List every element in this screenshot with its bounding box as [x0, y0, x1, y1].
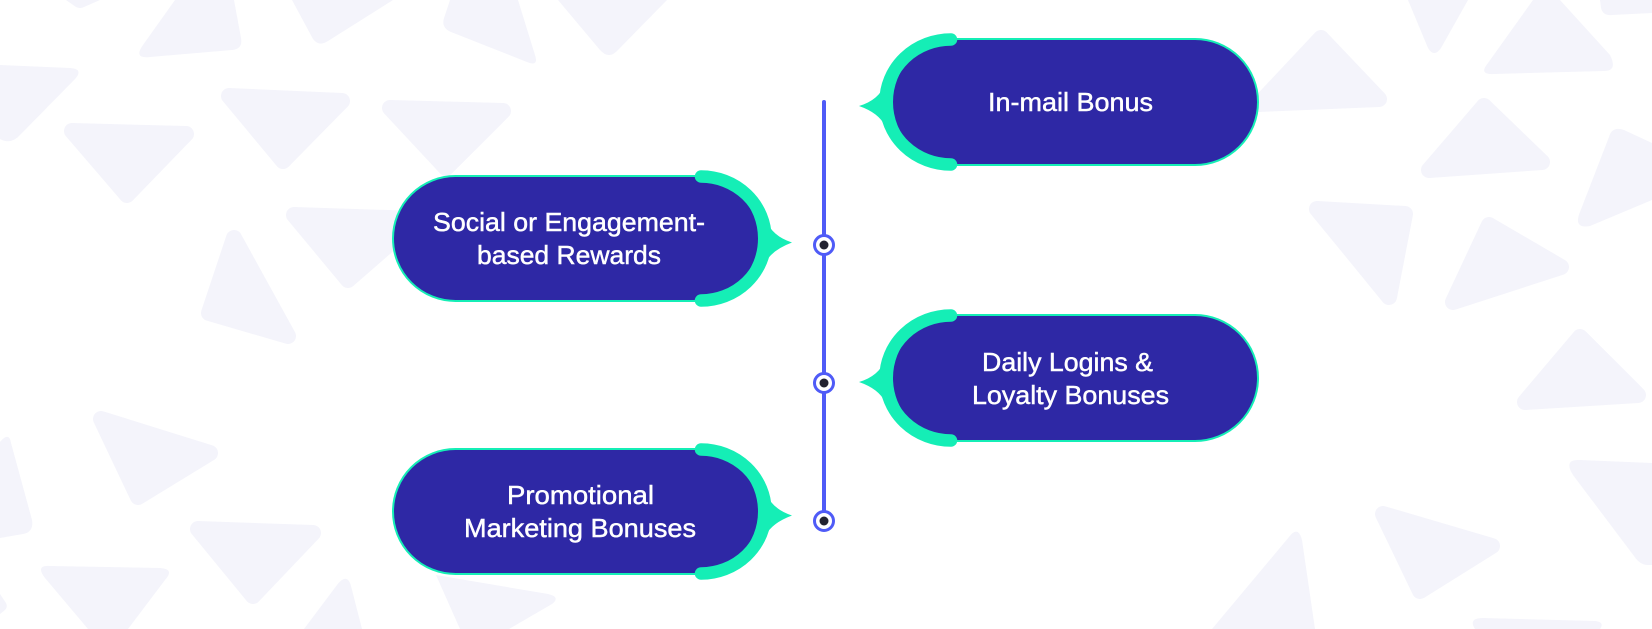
- label: Daily Logins &: [982, 347, 1153, 377]
- label: Marketing Bonuses: [464, 513, 696, 543]
- teal crescent with pointer: [701, 450, 792, 574]
- timeline node 2: [814, 374, 834, 392]
- teal crescent with pointer: [701, 176, 792, 300]
- label: based Rewards: [477, 240, 661, 270]
- timeline node 3: [814, 512, 834, 530]
- teal crescent with pointer: [859, 316, 951, 440]
- callout: Promotional Marketing Bonuses: [393, 449, 792, 574]
- callout: Social or Engagement-based Rewards: [393, 176, 792, 301]
- teal crescent with pointer: [859, 40, 951, 164]
- label: Social or Engagement-: [433, 207, 705, 237]
- timeline: [814, 102, 834, 530]
- timeline vertical line: [822, 102, 826, 520]
- label: In-mail Bonus: [988, 87, 1153, 117]
- timeline node 1: [814, 236, 834, 254]
- label: Loyalty Bonuses: [972, 380, 1169, 410]
- label: Promotional: [507, 480, 654, 510]
- callout: In-mail Bonus: [859, 39, 1258, 165]
- callout: Daily Logins & Loyalty Bonuses: [859, 315, 1258, 441]
